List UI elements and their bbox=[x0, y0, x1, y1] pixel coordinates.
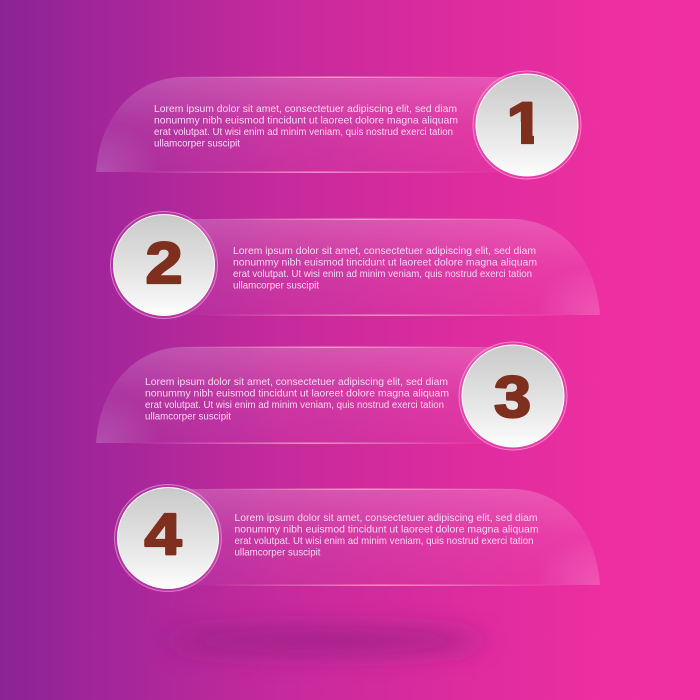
panel 3 bbox=[96, 346, 496, 444]
number 2: 2 bbox=[145, 231, 183, 296]
panel 1 text: Lorem ipsum dolor sit amet, consectetuer adipiscing elit, sed diam bbox=[154, 104, 457, 115]
panel 1 top highlight bbox=[170, 76, 500, 78]
panel 1 text bbox=[154, 104, 458, 150]
panel 2 text: Lorem ipsum dolor sit amet, consectetuer adipiscing elit, sed diam bbox=[233, 246, 536, 257]
panel 4 text: nonummy nibh euismod tincidunt ut laoreet dolore magna aliquam bbox=[234, 524, 538, 536]
panel 4 glass shape bbox=[186, 489, 600, 585]
panel 1 bottom highlight bbox=[130, 172, 500, 173]
panel 1 corner sheen bbox=[96, 135, 144, 172]
badge 2 bbox=[110, 212, 218, 318]
badge 4 bbox=[114, 484, 222, 592]
panel 4 text: ullamcorper suscipit bbox=[234, 548, 321, 558]
panel 4 text: Lorem ipsum dolor sit amet, consectetuer adipiscing elit, sed diam bbox=[234, 513, 538, 524]
panel 3 corner sheen bbox=[96, 406, 144, 443]
floor shadow bbox=[165, 628, 485, 654]
panel 3 text: ullamcorper suscipit bbox=[145, 412, 231, 422]
panel 3 text: nonummy nibh euismod tincidunt ut laoreet dolore magna aliquam bbox=[145, 388, 449, 400]
panel 2 text bbox=[233, 246, 537, 292]
number 1: 1 bbox=[506, 91, 544, 156]
panel 4 text bbox=[234, 513, 538, 558]
panel 4 bbox=[186, 488, 600, 586]
panel 2 bottom highlight bbox=[200, 314, 570, 316]
panel 2 text: erat volutpat. Ut wisi enim ad minim veniam, quis nostrud exerci tation bbox=[233, 269, 532, 280]
panel 4 corner sheen bbox=[552, 548, 600, 585]
panel 1 bbox=[96, 76, 508, 173]
badge 3 bbox=[459, 342, 567, 450]
panel 4 text: erat volutpat. Ut wisi enim ad minim veniam, quis nostrud exerci tation bbox=[234, 536, 534, 547]
panel 2 corner sheen bbox=[552, 278, 600, 315]
panel 2 text: nonummy nibh euismod tincidunt ut laoreet dolore magna aliquam bbox=[233, 258, 537, 268]
panel 1 text: erat volutpat. Ut wisi enim ad minim veniam, quis nostrud exerci tation bbox=[154, 127, 453, 138]
panel 3 glass shape bbox=[96, 347, 500, 443]
panel 3 top highlight bbox=[170, 346, 490, 348]
panel 3 bottom highlight bbox=[130, 442, 490, 444]
panel 2 text: ullamcorper suscipit bbox=[233, 280, 319, 292]
panel 3 text bbox=[145, 377, 449, 422]
panel 1 glass shape bbox=[96, 77, 510, 172]
panel 4 top highlight bbox=[200, 488, 530, 490]
panel 1 text: nonummy nibh euismod tincidunt ut laoreet dolore magna aliquam bbox=[154, 116, 458, 126]
panel 2 bbox=[186, 218, 600, 316]
panel 3 text: erat volutpat. Ut wisi enim ad minim veniam, quis nostrud exerci tation bbox=[145, 400, 444, 411]
number 4: 4 bbox=[144, 502, 182, 567]
panel 2 glass shape bbox=[186, 219, 600, 315]
number 3: 3 bbox=[494, 365, 531, 430]
panel 3 text: Lorem ipsum dolor sit amet, consectetuer adipiscing elit, sed diam bbox=[145, 377, 448, 388]
badge 1 bbox=[473, 71, 581, 179]
panel 4 bottom highlight bbox=[200, 584, 570, 586]
panel 2 top highlight bbox=[200, 218, 530, 220]
panel 1 text: ullamcorper suscipit bbox=[154, 138, 240, 150]
